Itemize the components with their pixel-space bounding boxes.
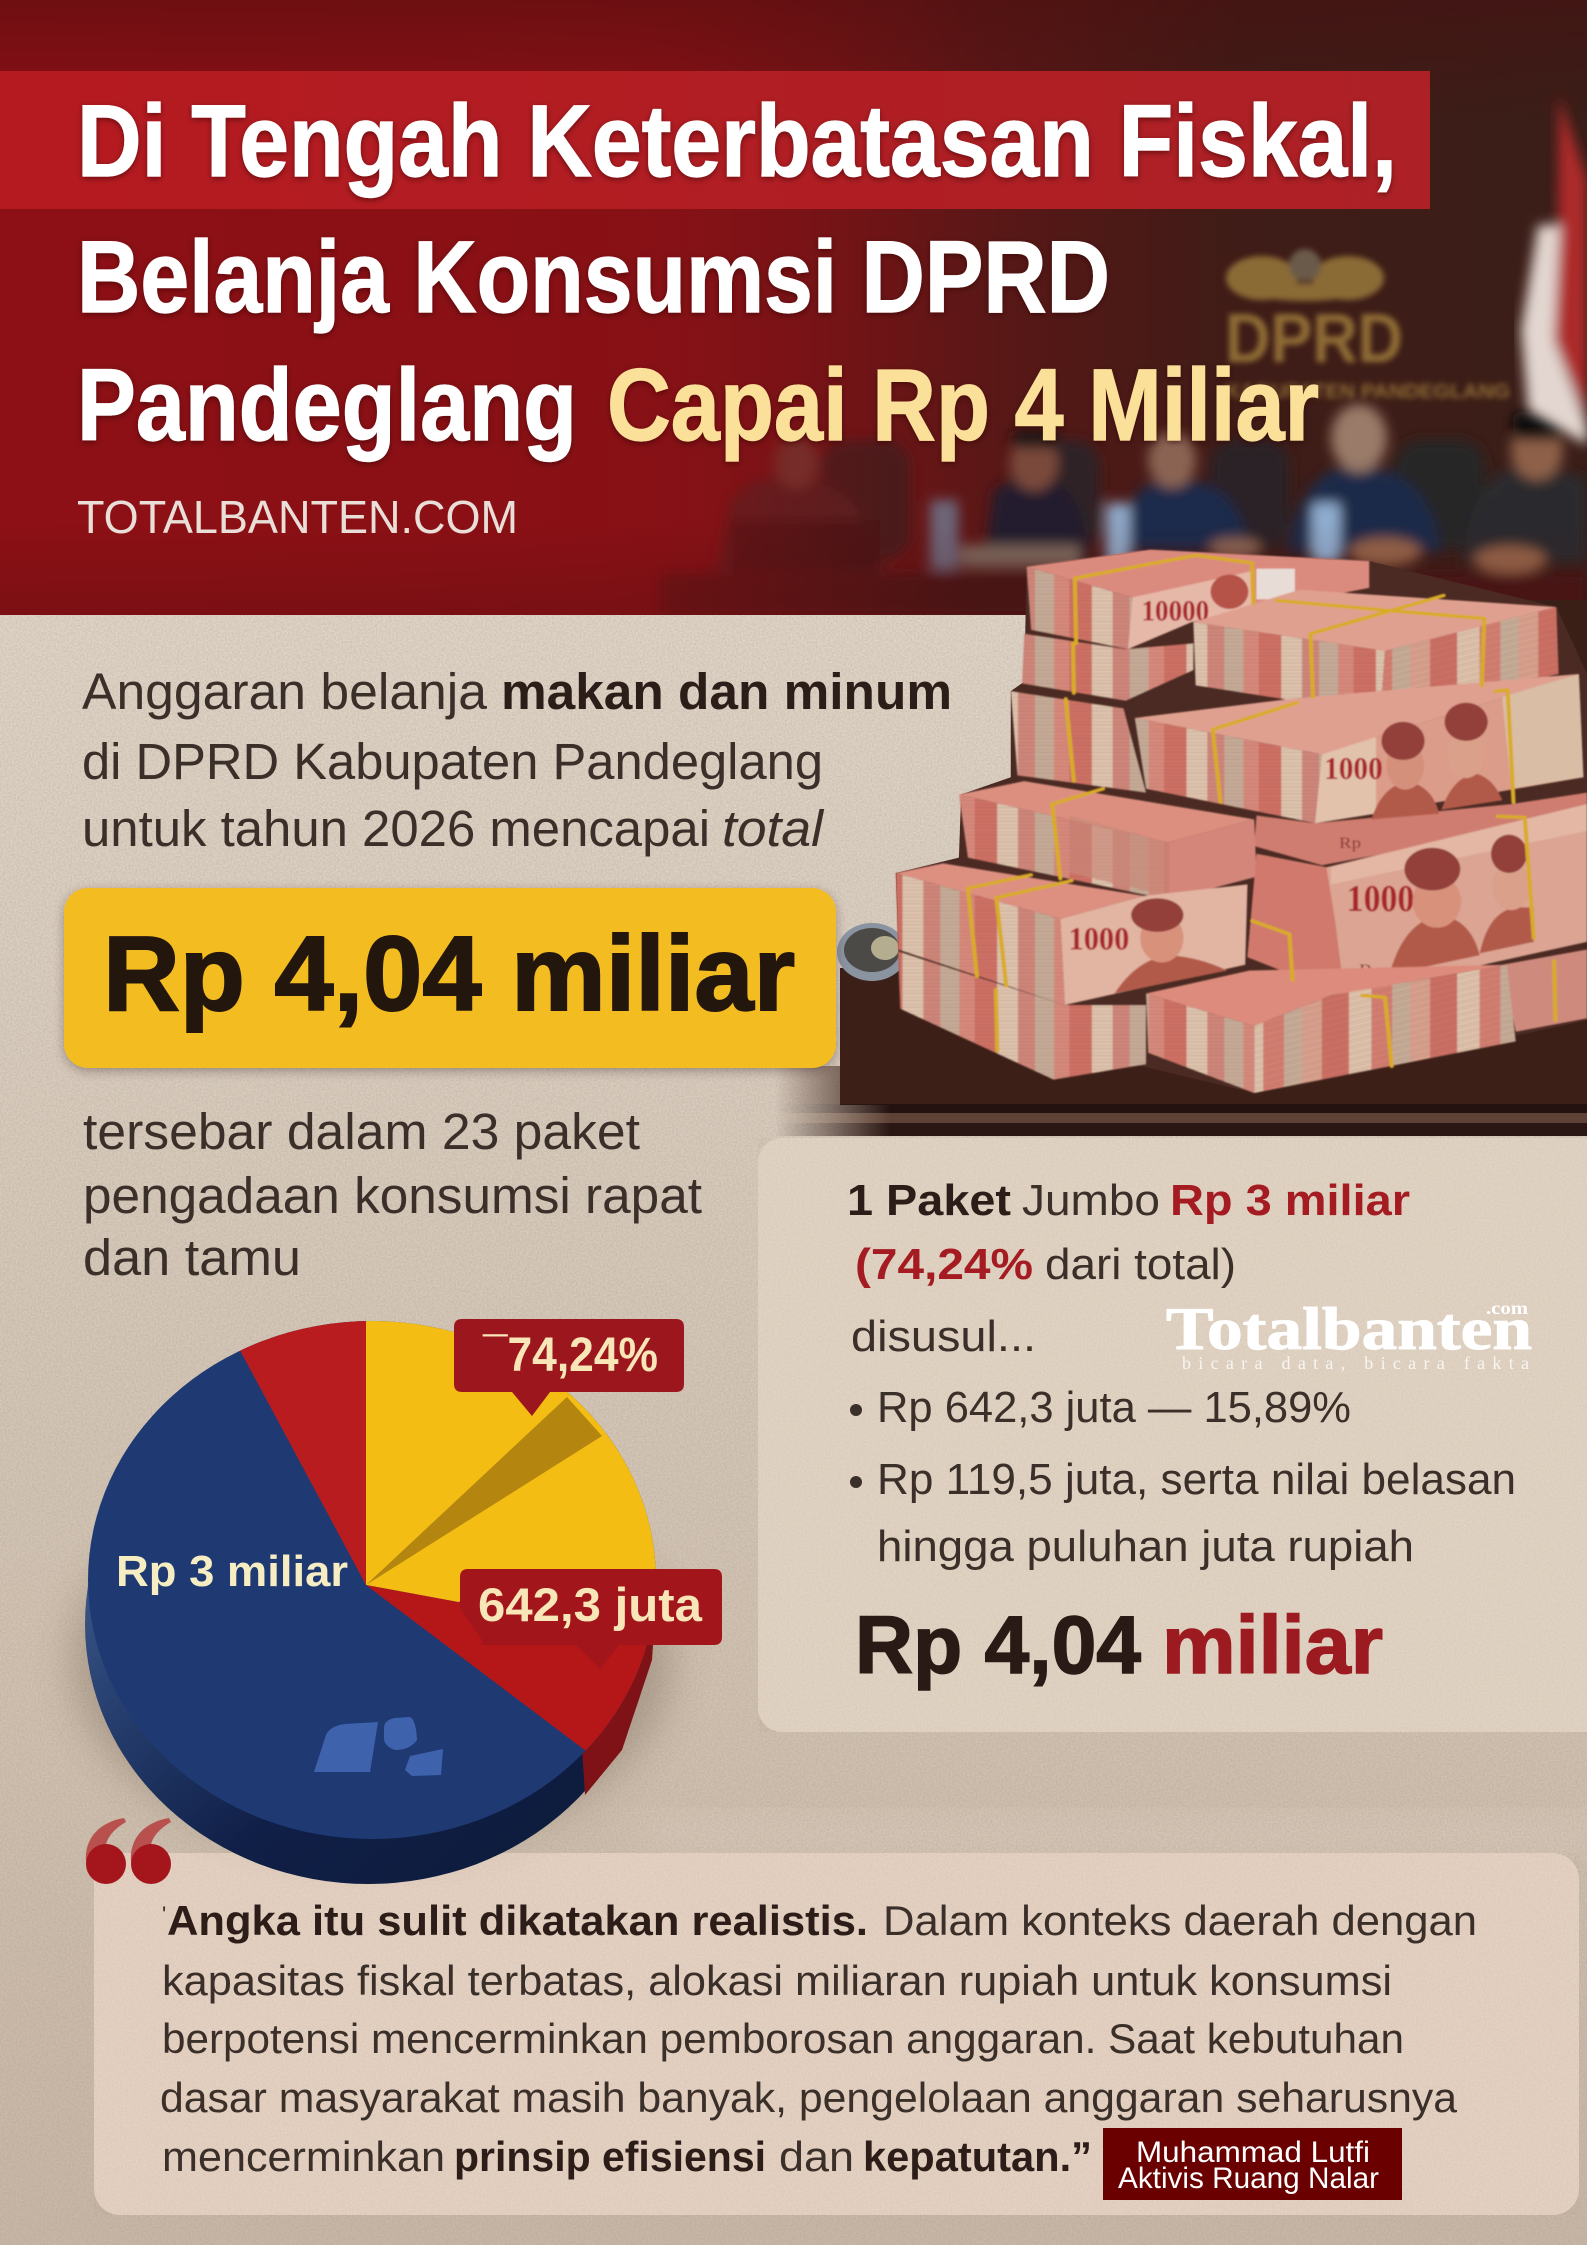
- stack 9: [898, 951, 1146, 1080]
- emblem: [1226, 249, 1384, 301]
- stack 2: [1022, 634, 1193, 701]
- yellow bands: [968, 555, 1555, 1066]
- stack 4: [1011, 691, 1146, 793]
- slice: yellow shaded wedge: [366, 1397, 602, 1585]
- intro text: di DPRD Kabupaten Pandeglang: [82, 733, 823, 790]
- quote text: kepatutan.”: [863, 2133, 1092, 2180]
- icon: opening quote mark: [86, 1818, 171, 1884]
- header photo background: [0, 0, 1587, 615]
- bottles and hands: [1106, 503, 1130, 563]
- distribution text: dan tamu: [83, 1229, 301, 1286]
- watermark: .com: [1486, 1298, 1528, 1318]
- distribution text: pengadaan konsumsi rapat: [83, 1167, 702, 1224]
- intro text: makan dan minum: [501, 663, 952, 720]
- quote text: berpotensi mencerminkan pemborosan anggaran. Saat kebutuhan: [162, 2015, 1404, 2062]
- breakdown text: Rp 642,3 juta — 15,89%: [877, 1383, 1351, 1432]
- title: [77, 84, 1397, 462]
- quote text: ': [162, 1902, 166, 1927]
- DPRD wall sign: [1224, 310, 1512, 401]
- distribution text: [83, 1103, 702, 1286]
- DPRD wall sign: DPRD: [1225, 299, 1403, 377]
- highlight: Rp 4,04 miliar: Rp 4,04 miliar: [103, 915, 795, 1033]
- slice: yellow: [366, 1321, 656, 1602]
- pie side: [85, 1364, 656, 1884]
- portraits: [1371, 781, 1439, 819]
- source label: TOTALBANTEN.COM: [77, 491, 518, 543]
- breakdown text: Rp 119,5 juta, serta nilai belasan: [877, 1455, 1516, 1504]
- quote text: mencerminkan: [162, 2133, 445, 2180]
- portraits: [1390, 915, 1480, 974]
- stack 3: [1193, 590, 1559, 714]
- stack 8: 1000: [1068, 920, 1129, 957]
- stack 5 under: [1254, 793, 1587, 865]
- stack 5: [1135, 674, 1583, 852]
- table under money: [775, 600, 1587, 1136]
- breakdown text: [847, 1176, 1516, 1571]
- heads: [774, 437, 818, 489]
- blurred council photo: [660, 404, 1587, 615]
- quote text: dasar masyarakat masih banyak, pengelolaan anggaran seharusnya: [160, 2074, 1458, 2121]
- attribution box: Muhammad Lutfi: [1136, 2136, 1370, 2169]
- intro text: [82, 663, 952, 857]
- watermark: bicara data, bicara fakta: [1182, 1353, 1529, 1373]
- plate on table: [837, 923, 907, 981]
- stack 1: [1027, 550, 1369, 649]
- callout: 642,3 juta: [460, 1569, 722, 1669]
- callout: 642,3 juta: 642,3 juta: [478, 1578, 703, 1631]
- chairs: [1210, 440, 1290, 550]
- quote text: dan: [779, 2133, 854, 2180]
- panel total: [855, 1600, 1383, 1691]
- stack 7: [1247, 804, 1587, 995]
- breakdown text: dari total): [1045, 1240, 1236, 1289]
- quote text: Angka itu sulit dikatakan realistis.: [167, 1897, 868, 1944]
- pie chart: [60, 1300, 722, 1884]
- breakdown text: Rp 3 miliar: [1170, 1176, 1410, 1225]
- slice: red right: [366, 1585, 647, 1750]
- stack 6: [959, 781, 1257, 900]
- attribution box: Aktivis Ruang Nalar: [1118, 2162, 1379, 2195]
- callout: 74,24%: ¯74,24%: [482, 1329, 658, 1382]
- money pile illustration: [896, 550, 1587, 1093]
- panel total: Rp 4,04: [855, 1600, 1141, 1691]
- quote panel: [94, 1853, 1579, 2215]
- title: Capai Rp 4 Miliar: [607, 348, 1319, 462]
- DPRD wall sign: KABUPATEN PANDEGLANG: [1225, 381, 1510, 403]
- stack 1: 10000: [1142, 595, 1209, 628]
- breakdown text: disusul...: [851, 1312, 1036, 1361]
- title: Belanja Konsumsi DPRD: [77, 220, 1110, 334]
- intro text: Anggaran belanja: [82, 663, 488, 720]
- national flag: [1521, 95, 1587, 445]
- attribution box: [1103, 2128, 1402, 2200]
- highlight: Rp 4,04 miliar: [64, 888, 836, 1068]
- title: Pandeglang: [77, 348, 577, 462]
- stack 5: 1000: [1324, 751, 1383, 787]
- label: Rp 3 miliar: Rp 3 miliar: [116, 1547, 348, 1596]
- stack 7: Rp: [1359, 962, 1383, 981]
- quote text: [160, 1897, 1477, 2180]
- pie top face: [88, 1321, 656, 1839]
- distribution text: tersebar dalam 23 paket: [83, 1103, 640, 1160]
- stack 11: [1502, 949, 1587, 1032]
- breakdown text: (74,24%: [855, 1240, 1033, 1289]
- stack 10: [1146, 965, 1516, 1093]
- quote text: prinsip efisiensi: [454, 2133, 766, 2180]
- quote text: kapasitas fiskal terbatas, alokasi miliaran rupiah untuk konsumsi: [162, 1957, 1392, 2004]
- title banner: [0, 71, 1430, 209]
- title: Di Tengah Keterbatasan Fiskal,: [77, 84, 1397, 198]
- slice: red top: [213, 1300, 366, 1585]
- intro text: total: [722, 800, 825, 857]
- breakdown text: 1 Paket: [847, 1176, 1011, 1225]
- breakdown text: hingga puluhan juta rupiah: [877, 1522, 1414, 1571]
- panel total: miliar: [1162, 1600, 1383, 1691]
- breakdown text: Jumbo: [1022, 1176, 1160, 1225]
- watermark: Totalbanten: [1166, 1296, 1532, 1362]
- stack 7: 1000: [1347, 878, 1414, 920]
- blue slice marks: [314, 1717, 443, 1776]
- suits: [718, 476, 854, 572]
- pile shadow silhouette: [896, 550, 1587, 1093]
- stack 8: [896, 863, 1247, 1005]
- panel: package breakdown: [758, 1138, 1587, 1732]
- callout: 74,24%: [454, 1319, 684, 1416]
- intro text: untuk tahun 2026 mencapai: [82, 800, 710, 857]
- quote text: Dalam konteks daerah dengan: [883, 1897, 1477, 1944]
- stack 5: Rp: [1339, 833, 1361, 852]
